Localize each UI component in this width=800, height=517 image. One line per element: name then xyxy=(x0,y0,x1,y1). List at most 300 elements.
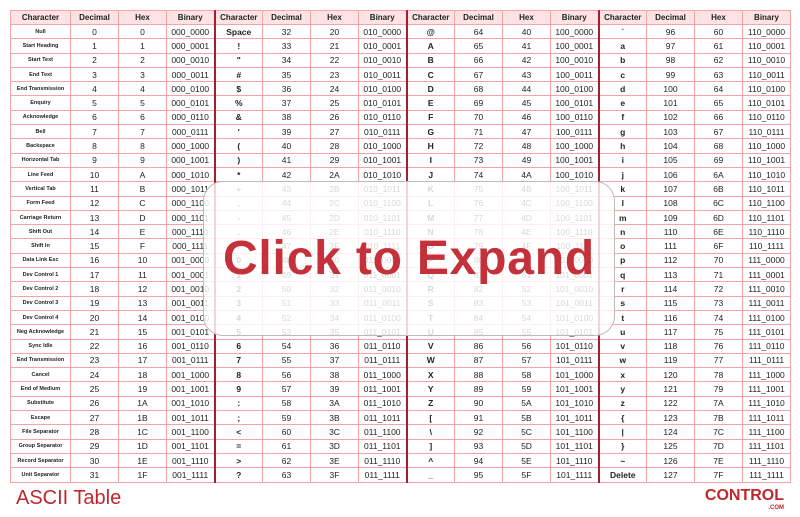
ASCII table: 100_0111 xyxy=(556,127,593,137)
ASCII table: Form Feed xyxy=(26,200,55,206)
ASCII table: D xyxy=(428,84,434,94)
ASCII table: 40 xyxy=(282,141,291,151)
ASCII table: 73 xyxy=(714,298,723,308)
ASCII table: 111_1011 xyxy=(749,413,784,423)
ASCII table: 77 xyxy=(714,355,723,365)
ASCII table: 72 xyxy=(474,141,483,151)
ASCII table: 70 xyxy=(474,112,483,122)
ASCII table: # xyxy=(236,70,241,80)
ASCII table: 121 xyxy=(663,384,678,394)
ASCII table: Escape xyxy=(31,415,50,421)
ASCII table: 1 xyxy=(236,270,241,280)
ASCII table: T xyxy=(428,313,433,323)
ASCII table: * xyxy=(237,170,240,180)
ASCII table: 83 xyxy=(474,298,483,308)
ASCII table: 1E xyxy=(137,456,148,466)
ASCII table: 0 xyxy=(236,255,241,265)
ASCII table: 000_1100 xyxy=(172,198,209,208)
ASCII table: 000_0110 xyxy=(172,112,209,122)
ASCII table: 26 xyxy=(90,398,99,408)
ASCII table: 32 xyxy=(282,27,291,37)
ASCII table: 18 xyxy=(138,370,147,380)
ASCII table: Data Link Esc xyxy=(22,257,59,263)
ASCII table: 62 xyxy=(282,456,291,466)
ASCII table: 66 xyxy=(714,112,723,122)
ASCII table: 001_0101 xyxy=(171,327,209,337)
ASCII table: 60 xyxy=(282,427,291,437)
ASCII table: 001_0100 xyxy=(171,313,209,323)
ASCII table: 7C xyxy=(713,427,724,437)
ASCII table: 37 xyxy=(282,98,291,108)
ASCII table: F xyxy=(140,241,145,251)
ASCII table: 119 xyxy=(664,355,677,365)
ASCII table: 9 xyxy=(236,384,241,394)
ASCII table: k xyxy=(620,184,625,194)
ASCII table: Decimal xyxy=(271,13,302,22)
ASCII table: C xyxy=(428,70,434,80)
ASCII table: 15 xyxy=(90,241,99,251)
ASCII table: 011_1100 xyxy=(364,427,401,437)
ASCII table: 110_1111 xyxy=(749,241,784,251)
ASCII table: S xyxy=(428,298,434,308)
ASCII table: 30 xyxy=(330,255,339,265)
ASCII table: 111_1001 xyxy=(748,384,785,394)
ASCII table: 81 xyxy=(474,270,483,280)
ASCII table: 1B xyxy=(137,413,148,423)
ASCII table: 40 xyxy=(522,27,531,37)
ASCII table: 011_1000 xyxy=(364,370,401,380)
ASCII table: 41 xyxy=(522,41,531,51)
ASCII table: 011_1010 xyxy=(364,398,401,408)
ASCII table: 61 xyxy=(282,441,291,451)
ASCII table: D xyxy=(139,212,146,222)
ASCII table: 3 xyxy=(92,70,97,80)
ASCII table: . xyxy=(238,227,240,237)
ASCII table: 104 xyxy=(663,141,678,151)
ASCII table: End Text xyxy=(29,72,52,78)
ASCII table: Start Heading xyxy=(23,43,58,49)
ASCII table: j xyxy=(622,170,624,180)
ASCII table: 15 xyxy=(138,327,147,337)
ASCII table: Dev Control 2 xyxy=(23,286,58,292)
ASCII table: 001_1111 xyxy=(172,470,208,480)
ASCII table: 35 xyxy=(330,327,339,337)
ASCII table: Y xyxy=(428,384,434,394)
ASCII table: O xyxy=(427,241,434,251)
ASCII table: 000_0010 xyxy=(171,55,209,65)
ASCII table: 101_0101 xyxy=(555,327,593,337)
ASCII table: [ xyxy=(429,413,432,423)
ASCII table: 29 xyxy=(330,155,339,165)
ASCII table: 111 xyxy=(664,241,677,251)
ASCII table: W xyxy=(427,355,435,365)
ASCII table: 011_0000 xyxy=(364,255,401,265)
ASCII table: Decimal xyxy=(463,13,494,22)
ASCII table: 11 xyxy=(90,184,99,194)
ASCII table: 6A xyxy=(713,170,724,180)
ASCII table: 20 xyxy=(90,313,99,323)
ASCII table: } xyxy=(621,441,624,451)
ASCII table: Null xyxy=(35,29,46,35)
ASCII table: 64 xyxy=(714,84,723,94)
ASCII table: s xyxy=(620,298,625,308)
ASCII table: 78 xyxy=(474,227,483,237)
ASCII table: " xyxy=(237,55,241,65)
ASCII table: 31 xyxy=(330,270,339,280)
ASCII table: J xyxy=(428,170,433,180)
ASCII table: 111_0101 xyxy=(748,327,785,337)
ASCII table: 33 xyxy=(282,41,291,51)
ASCII table: 111_0010 xyxy=(748,284,785,294)
ASCII table: 101_1000 xyxy=(555,370,593,380)
ASCII table: 001_1100 xyxy=(172,427,209,437)
ASCII table: 26 xyxy=(330,112,339,122)
ASCII table: 110_0111 xyxy=(749,127,784,137)
ASCII table: 7D xyxy=(713,441,724,451)
ASCII table: 000_0001 xyxy=(171,41,209,51)
ASCII table: w xyxy=(619,355,626,365)
ASCII table: K xyxy=(428,184,434,194)
ASCII table: 54 xyxy=(282,341,291,351)
ASCII table: 110_1100 xyxy=(748,198,785,208)
ASCII table: 127 xyxy=(663,470,678,480)
ASCII table: 102 xyxy=(663,112,678,122)
ASCII table: 68 xyxy=(714,141,723,151)
ASCII table: 36 xyxy=(330,341,339,351)
ASCII table: 010_1010 xyxy=(363,170,401,180)
overlay: click to expand xyxy=(203,181,615,336)
ASCII table: Q xyxy=(427,270,434,280)
ASCII table: 4D xyxy=(521,212,532,222)
ASCII table: 88 xyxy=(474,370,483,380)
ASCII table: m xyxy=(619,212,627,222)
ASCII table: L xyxy=(428,198,433,208)
ASCII table: 67 xyxy=(714,127,723,137)
ASCII table: 101_0010 xyxy=(555,284,593,294)
ASCII table: 011_0111 xyxy=(364,355,400,365)
ASCII table: 8 xyxy=(92,141,97,151)
ASCII table: o xyxy=(620,241,625,251)
ASCII table: 4 xyxy=(140,84,145,94)
ASCII table: 011_0110 xyxy=(364,341,401,351)
ASCII table: 011_0011 xyxy=(364,298,401,308)
ASCII table: l xyxy=(622,198,624,208)
ASCII table: 100_0100 xyxy=(555,84,593,94)
ASCII table: 48 xyxy=(282,255,291,265)
ASCII table: Z xyxy=(428,398,433,408)
ASCII table: 93 xyxy=(474,441,483,451)
ASCII table: Sync Idle xyxy=(28,343,53,349)
ASCII table: 34 xyxy=(282,55,291,65)
ASCII table: 100_0011 xyxy=(556,70,593,80)
ASCII table: 46 xyxy=(522,112,531,122)
ASCII table: 73 xyxy=(474,155,483,165)
ASCII table: 86 xyxy=(474,341,483,351)
ASCII table: 50 xyxy=(522,255,531,265)
ASCII table: 70 xyxy=(714,255,723,265)
ASCII table: 010_1100 xyxy=(364,198,401,208)
ASCII table: = xyxy=(236,441,241,451)
ASCII table: 101_0011 xyxy=(556,298,593,308)
ASCII table: End of Medium xyxy=(21,386,60,392)
ASCII table: 21 xyxy=(90,327,99,337)
ASCII table: 116 xyxy=(664,313,677,323)
ASCII table: 001_0010 xyxy=(171,284,209,294)
ASCII table: 125 xyxy=(663,441,678,451)
ASCII table: 6F xyxy=(714,241,723,251)
ASCII table: 6 xyxy=(140,112,145,122)
ASCII table: 5 xyxy=(140,98,145,108)
ASCII table: 010_1001 xyxy=(363,155,401,165)
ASCII table: 79 xyxy=(474,241,483,251)
ASCII table: 5 xyxy=(92,98,97,108)
ASCII table: 67 xyxy=(474,70,483,80)
ASCII table: 101_0100 xyxy=(555,313,593,323)
ASCII table: Start Text xyxy=(28,57,53,63)
ASCII table: Hex xyxy=(327,13,342,22)
ASCII table: 12 xyxy=(138,284,147,294)
ASCII table: ` xyxy=(621,27,624,37)
ASCII table: 110_1001 xyxy=(748,155,785,165)
ASCII table: 22 xyxy=(90,341,99,351)
ASCII table: p xyxy=(620,255,625,265)
ASCII table: 5D xyxy=(521,441,532,451)
ASCII table: 49 xyxy=(282,270,291,280)
ASCII table: e xyxy=(620,98,625,108)
ASCII table: 9 xyxy=(140,155,145,165)
ASCII table: Binary xyxy=(754,13,779,22)
ASCII table: , xyxy=(238,198,240,208)
ASCII table: ? xyxy=(236,470,241,480)
ASCII table: 001_0011 xyxy=(172,298,209,308)
ASCII table: 106 xyxy=(663,170,678,180)
ASCII table: 110_0010 xyxy=(748,55,785,65)
ASCII table: Binary xyxy=(178,13,203,22)
ASCII table: < xyxy=(236,427,241,437)
ASCII table: 100_0000 xyxy=(555,27,593,37)
ASCII table: 78 xyxy=(714,370,723,380)
ASCII table: 68 xyxy=(474,84,483,94)
ASCII table: 6 xyxy=(92,112,97,122)
ASCII table: 2A xyxy=(329,170,340,180)
ASCII table: 27 xyxy=(330,127,339,137)
ASCII table: 34 xyxy=(330,313,339,323)
ASCII table: Character xyxy=(22,13,59,22)
ASCII table: 16 xyxy=(90,255,99,265)
ASCII table: 53 xyxy=(522,298,531,308)
ASCII table: 114 xyxy=(664,284,677,294)
ASCII table: + xyxy=(236,184,241,194)
ASCII table: 110_0101 xyxy=(748,98,785,108)
ASCII table: 3B xyxy=(329,413,340,423)
ASCII table: Shift In xyxy=(31,243,50,249)
ASCII table: 101_0000 xyxy=(555,255,593,265)
ASCII table: 100_0001 xyxy=(555,41,593,51)
ASCII table: 41 xyxy=(282,155,291,165)
ASCII table: 12 xyxy=(90,198,99,208)
ASCII table: 0 xyxy=(140,27,145,37)
ASCII table: ( xyxy=(237,141,240,151)
ASCII table: 8 xyxy=(236,370,241,380)
ASCII table: 7F xyxy=(714,470,723,480)
ASCII table: A xyxy=(140,170,145,180)
ASCII table: c xyxy=(620,70,625,80)
ASCII table: 100_1010 xyxy=(555,170,593,180)
ASCII table: 2 xyxy=(140,55,145,65)
ASCII table: 6C xyxy=(713,198,724,208)
ASCII table: 22 xyxy=(330,55,339,65)
ASCII table: 79 xyxy=(714,384,723,394)
ASCII table: 7A xyxy=(713,398,724,408)
ASCII table: 000_0100 xyxy=(171,84,209,94)
ASCII table: 103 xyxy=(663,127,678,137)
ASCII table: 3C xyxy=(329,427,340,437)
ASCII table: 74 xyxy=(714,313,723,323)
ASCII table: 111_1110 xyxy=(749,456,784,466)
ASCII table: 000_1110 xyxy=(172,227,209,237)
ASCII table: X xyxy=(428,370,434,380)
ASCII table: 0 xyxy=(92,27,97,37)
ASCII table: 28 xyxy=(90,427,99,437)
ASCII table: 95 xyxy=(474,470,483,480)
ASCII table: 4F xyxy=(522,241,531,251)
ASCII table: 97 xyxy=(666,41,675,51)
ASCII table: 120 xyxy=(663,370,678,380)
ASCII table: 5C xyxy=(521,427,532,437)
ASCII table: 126 xyxy=(663,456,678,466)
ASCII table: 89 xyxy=(474,384,483,394)
ASCII table: End Transmission xyxy=(17,357,64,363)
ASCII table: 92 xyxy=(474,427,483,437)
ASCII table: 49 xyxy=(522,155,531,165)
ASCII table: 4 xyxy=(236,313,241,323)
ASCII table: 001_0110 xyxy=(172,341,209,351)
ASCII table: Line Feed xyxy=(28,172,53,178)
ASCII table: 109 xyxy=(663,212,678,222)
ASCII table: 56 xyxy=(522,341,531,351)
ASCII table: Acknowledge xyxy=(23,114,58,120)
ASCII table: 100 xyxy=(663,84,678,94)
logo: control.com: CONTROL xyxy=(705,487,784,504)
ASCII table: 52 xyxy=(282,313,291,323)
ASCII table: 66 xyxy=(474,55,483,65)
ASCII table: | xyxy=(622,427,624,437)
ASCII table: 011_0100 xyxy=(364,313,401,323)
ASCII table: 58 xyxy=(522,370,531,380)
ASCII table: n xyxy=(620,227,625,237)
ASCII table: 58 xyxy=(282,398,291,408)
ASCII table: 100_1111 xyxy=(556,241,592,251)
ASCII table: Bell xyxy=(35,129,46,135)
ASCII table: 4 xyxy=(92,84,97,94)
ASCII table: 110_1110 xyxy=(749,227,784,237)
ASCII table: Shift Out xyxy=(29,229,52,235)
ASCII table: 82 xyxy=(474,284,483,294)
ASCII table: Dev Control 4 xyxy=(23,315,58,321)
ASCII table: 1C xyxy=(137,427,148,437)
ASCII table: 2C xyxy=(329,198,340,208)
ASCII table: 2F xyxy=(330,241,339,251)
ASCII table: 6E xyxy=(713,227,724,237)
ASCII table: z xyxy=(621,398,625,408)
ASCII table: 000_1011 xyxy=(172,184,209,194)
ASCII table: 57 xyxy=(282,384,291,394)
ASCII table: 111_1100 xyxy=(749,427,784,437)
ASCII table: 011_1110 xyxy=(364,456,400,466)
ASCII table: 3E xyxy=(329,456,340,466)
ASCII table: 3F xyxy=(330,470,339,480)
ASCII table: 011_1001 xyxy=(364,384,401,394)
ASCII table: 001_0111 xyxy=(172,355,209,365)
ASCII table: 112 xyxy=(664,255,677,265)
ASCII table: 111_0011 xyxy=(749,298,784,308)
ASCII table: 100_1110 xyxy=(556,227,593,237)
ASCII table: 7 xyxy=(140,127,145,137)
ASCII table: 4C xyxy=(521,198,532,208)
ASCII table: 108 xyxy=(663,198,678,208)
ASCII table: 36 xyxy=(282,84,291,94)
ASCII table: 001_1110 xyxy=(172,456,209,466)
ASCII table: d xyxy=(620,84,625,94)
ASCII table: 000_1111 xyxy=(172,241,208,251)
ASCII table: 9 xyxy=(92,155,97,165)
ASCII table: : xyxy=(237,398,240,408)
ASCII table: 010_1000 xyxy=(363,141,401,151)
ASCII table: 113 xyxy=(664,270,677,280)
ASCII table: 5 xyxy=(236,327,241,337)
ASCII table: > xyxy=(236,456,241,466)
ASCII table: 37 xyxy=(330,355,339,365)
ASCII table: 75 xyxy=(714,327,723,337)
ASCII table: 44 xyxy=(282,198,291,208)
ASCII table: ' xyxy=(238,127,240,137)
ASCII table: I xyxy=(430,155,432,165)
ASCII table: ] xyxy=(429,441,432,451)
ASCII table: 122 xyxy=(663,398,678,408)
ASCII table: 101_0111 xyxy=(556,355,593,365)
ASCII table: 45 xyxy=(282,212,291,222)
ASCII table: Cancel xyxy=(31,372,50,378)
ASCII table: 94 xyxy=(474,456,483,466)
ASCII table: 100_0010 xyxy=(555,55,593,65)
ASCII table: B xyxy=(428,55,434,65)
ASCII table: 110_0110 xyxy=(748,112,785,122)
ASCII table: Substitute xyxy=(27,400,54,406)
ASCII table: 29 xyxy=(90,441,99,451)
ASCII table: V xyxy=(428,341,434,351)
ASCII table: 1F xyxy=(138,470,147,480)
ASCII table: C xyxy=(139,198,146,208)
ASCII table: 100_0110 xyxy=(556,112,593,122)
ASCII table: 3A xyxy=(329,398,340,408)
ASCII table: 100_1100 xyxy=(556,198,593,208)
ASCII table: { xyxy=(621,413,624,423)
ASCII table: 84 xyxy=(474,313,483,323)
ASCII table: 7E xyxy=(713,456,724,466)
ASCII table: Enquiry xyxy=(30,100,51,106)
ASCII table: 2D xyxy=(329,212,340,222)
ASCII table: 011_1011 xyxy=(364,413,401,423)
ASCII table: 5B xyxy=(521,413,532,423)
logo: control.com: .COM xyxy=(768,505,784,511)
ASCII table: 87 xyxy=(474,355,483,365)
ASCII table: 85 xyxy=(474,327,483,337)
ASCII table: 101 xyxy=(663,98,678,108)
ASCII table: 25 xyxy=(90,384,99,394)
ASCII table: E xyxy=(428,98,434,108)
ASCII table: 001_1000 xyxy=(171,370,209,380)
ASCII table: 6 xyxy=(236,341,241,351)
